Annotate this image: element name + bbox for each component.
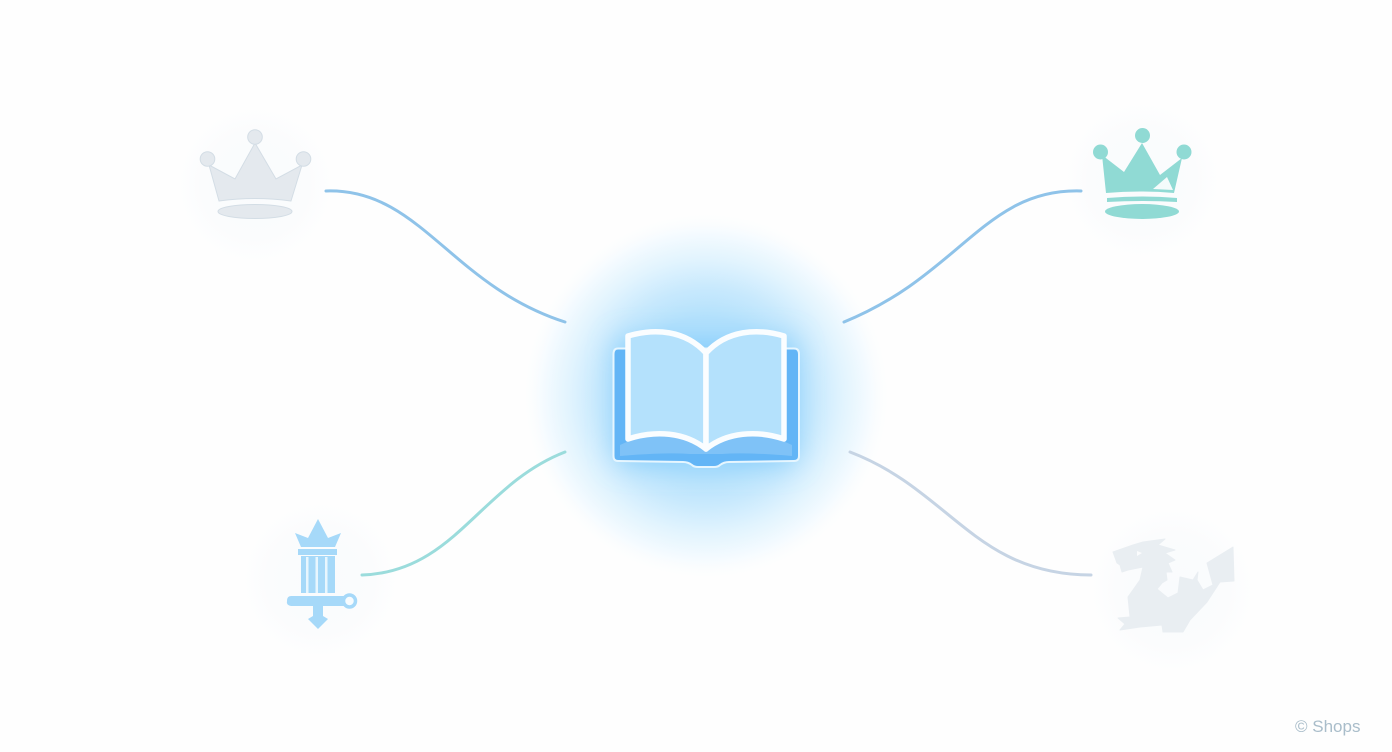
crown base <box>1105 204 1179 219</box>
icon: dragon <box>1113 539 1234 632</box>
icon: teal crown <box>1093 128 1192 219</box>
icon: open book <box>614 332 799 467</box>
icon: grey crown <box>200 130 311 218</box>
left page <box>628 332 706 449</box>
pillar <box>301 556 335 593</box>
connector: top right crown to book <box>844 191 1081 322</box>
crown body <box>1102 143 1182 193</box>
crown notch <box>1153 177 1173 190</box>
small crown <box>295 519 341 547</box>
crown jewels <box>248 130 262 144</box>
soft halos behind corner icons <box>165 90 1267 685</box>
icon: crowned sword <box>287 519 356 629</box>
lighter page stack <box>620 436 792 456</box>
connector: bottom left sword to book <box>362 452 565 575</box>
central blue glow <box>520 210 892 582</box>
crown band <box>1107 196 1177 202</box>
right page <box>706 332 784 449</box>
crossguard <box>287 596 346 606</box>
watermark: © Shops <box>1295 717 1360 736</box>
book cover <box>614 348 799 467</box>
crown jewels <box>1135 128 1150 143</box>
crown base <box>218 204 292 218</box>
connector: top left crown to book <box>326 191 565 322</box>
blade tip <box>308 606 328 629</box>
connector: bottom right dragon to book <box>850 452 1091 575</box>
ring <box>344 595 356 607</box>
pillar cap <box>298 549 337 555</box>
crown body <box>209 143 302 201</box>
